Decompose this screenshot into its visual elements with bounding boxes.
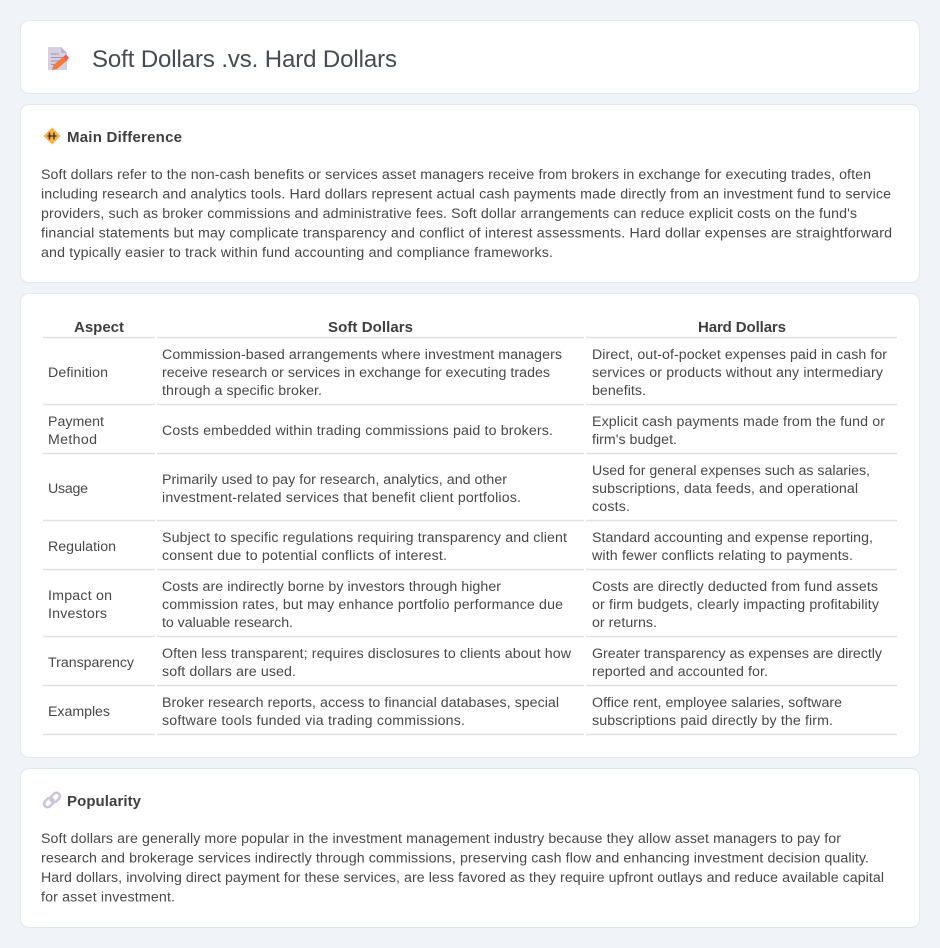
- table header: Aspect: [74, 319, 124, 336]
- row: transparency: [43, 646, 897, 686]
- row: usage: Primarily used to pay for research, analytics, and other: [162, 472, 507, 488]
- text block: main difference paragraph: and typically easier to track within fund accounting and compliance frameworks.: [41, 245, 553, 261]
- row: examples: Office rent, employee salaries, software: [592, 695, 842, 711]
- table header: Hard Dollars: [698, 319, 786, 336]
- heading: popularity: Popularity: [67, 793, 142, 810]
- panel: popularity: [20, 768, 920, 928]
- row: transparency: Often less transparent; requires disclosures to clients about how: [162, 646, 572, 662]
- row: impact on investors: or firm budgets, clearly impacting profitability: [592, 597, 880, 613]
- table header: Soft Dollars: [328, 319, 413, 336]
- panel: title header: [20, 20, 920, 94]
- row: definition: services or products without any intermediary: [592, 365, 884, 381]
- row: examples: subscriptions paid directly by the firm.: [592, 713, 833, 729]
- row: definition: Definition: [48, 365, 108, 381]
- row: examples: [43, 695, 897, 734]
- row: payment method: [43, 414, 897, 454]
- row: usage: Usage: [48, 481, 88, 497]
- text block: popularity paragraph: for asset investment.: [41, 890, 175, 906]
- row: payment method: Method: [48, 432, 97, 448]
- text block: main difference paragraph: [41, 167, 892, 261]
- row: payment method: Explicit cash payments made from the fund or: [592, 414, 885, 430]
- row: examples: Examples: [48, 704, 110, 720]
- table header: [43, 319, 897, 338]
- heading: main difference: Main Difference: [67, 129, 182, 146]
- icon: memo with pencil: [48, 47, 69, 70]
- row: regulation: Regulation: [48, 539, 116, 555]
- row: regulation: Standard accounting and expense reporting,: [592, 530, 873, 546]
- row: payment method: firm's budget.: [592, 432, 677, 448]
- row: usage: [43, 463, 897, 520]
- row: usage: investment-related services that benefit client portfolios.: [162, 490, 521, 506]
- row: usage: costs.: [592, 499, 630, 515]
- title: Soft Dollars .vs. Hard Dollars: [92, 46, 397, 73]
- icon: orange diamond sign: [44, 128, 60, 144]
- row: impact on investors: Investors: [48, 606, 107, 622]
- text block: main difference paragraph: financial statements but may complicate transparency and conflict of interest assessments. Hard dollar expenses are straightforward: [41, 226, 892, 242]
- row: regulation: Subject to specific regulations requiring transparency and client: [162, 530, 567, 546]
- row: regulation: consent due to potential conflicts of interest.: [162, 548, 447, 564]
- row: transparency: reported and accounted for.: [592, 664, 768, 680]
- row: transparency: Greater transparency as expenses are directly: [592, 646, 883, 662]
- text block: main difference paragraph: Soft dollars refer to the non-cash benefits or services asset managers receive from brokers in exchange for executing trades, often: [41, 167, 871, 183]
- panel: comparison table: [20, 294, 920, 758]
- row: impact on investors: or returns.: [592, 615, 657, 631]
- row: definition: [43, 347, 897, 404]
- row: usage: subscriptions, data feeds, and operational: [592, 481, 858, 497]
- row: examples: software tools funded via trading commissions.: [162, 713, 465, 729]
- row: regulation: with fewer conflicts relating to payments.: [591, 548, 853, 564]
- row: impact on investors: [43, 579, 897, 636]
- row: impact on investors: Costs are indirectly borne by investors through higher: [162, 579, 501, 595]
- text block: popularity paragraph: Hard dollars, involving direct payment for these services, are less favored as they require upfront outlays and reduce available capital: [41, 870, 884, 886]
- text block: popularity paragraph: [41, 831, 884, 906]
- row: transparency: soft dollars are used.: [162, 664, 296, 680]
- row: usage: Used for general expenses such as salaries,: [592, 463, 870, 479]
- text block: main difference paragraph: providers, such as broker commissions and administrative fees. Soft dollar arrangements can reduce explicit costs on the fund's: [41, 206, 857, 222]
- row: impact on investors: Impact on: [48, 588, 112, 604]
- row: impact on investors: commission rates, but may enhance portfolio performance due: [162, 597, 563, 613]
- row: payment method: Payment: [48, 414, 104, 430]
- row: transparency: Transparency: [48, 655, 135, 671]
- row: definition: through a specific broker.: [162, 383, 322, 399]
- row: impact on investors: to valuable research.: [162, 615, 293, 631]
- row: impact on investors: Costs are directly deducted from fund assets: [592, 579, 878, 595]
- text block: popularity paragraph: research and brokerage services indirectly through commissions, preserving cash flow and enhancing investment decision quality.: [41, 850, 869, 866]
- panel: main difference: [20, 104, 920, 282]
- row: definition: receive research or services in exchange for executing trades: [162, 365, 550, 381]
- row: examples: Broker research reports, access to financial databases, special: [162, 695, 559, 711]
- row: definition: benefits.: [592, 383, 646, 399]
- text block: popularity paragraph: Soft dollars are generally more popular in the investment management industry because they allow asset managers to pay for: [41, 831, 841, 847]
- row: regulation: [43, 530, 897, 570]
- text block: main difference paragraph: including research and analytics tools. Hard dollars represent actual cash payments made directly from an investment fund to service: [41, 186, 891, 202]
- icon: chain link: [43, 791, 61, 809]
- row: definition: Direct, out-of-pocket expenses paid in cash for: [592, 347, 887, 363]
- row: definition: Commission-based arrangements where investment managers: [162, 347, 562, 363]
- row: payment method: Costs embedded within trading commissions paid to brokers.: [162, 423, 553, 439]
